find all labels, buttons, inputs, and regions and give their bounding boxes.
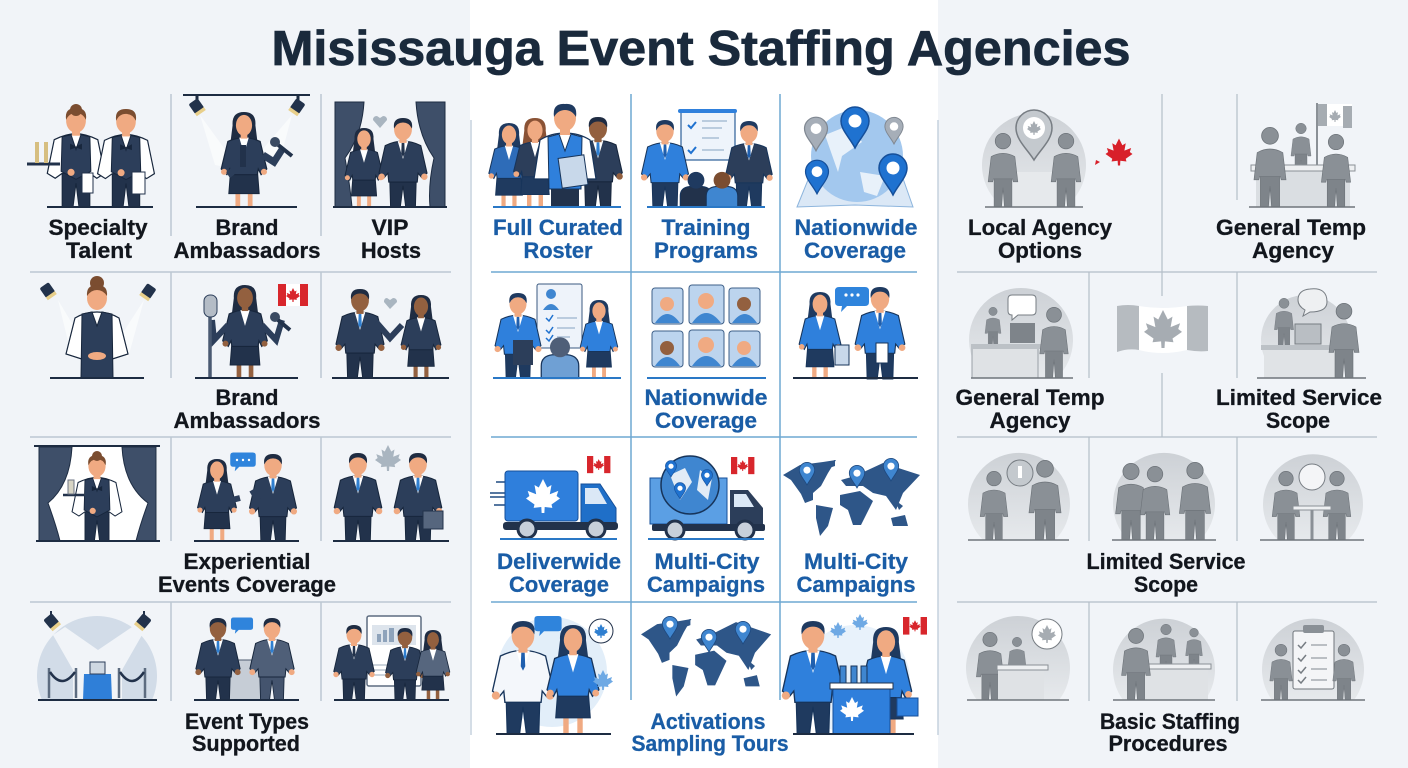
heading: Local Agency Options	[968, 215, 1113, 263]
heading: Multi-City Campaigns (second): Campaigns	[796, 572, 916, 597]
heading: VIP Hosts: VIP	[372, 215, 408, 240]
heading: Basic Staffing Procedures	[1100, 709, 1240, 756]
heading: Multi-City Campaigns: Multi-City	[654, 549, 760, 574]
heading: Full Curated Roster: Roster	[524, 238, 593, 263]
heading: Deliverwide Coverage	[497, 549, 621, 597]
heading: Brand Ambassadors: Ambassadors	[174, 238, 320, 263]
icon: interview desk	[966, 616, 1070, 700]
icon: nationwide globe and pins	[797, 107, 913, 207]
panel: local alternatives (right column)	[956, 103, 1382, 756]
icon: two hosts with speech bubble	[194, 452, 299, 541]
icon: limited service desk	[1257, 289, 1366, 378]
heading: Deliverwide Coverage: Deliverwide	[497, 549, 621, 574]
heading: VIP Hosts: Hosts	[361, 238, 421, 263]
icon: ambassador with microphone and flag	[195, 284, 308, 378]
heading: Specialty Talent: Talent	[66, 238, 133, 263]
heading: Event Types Supported: Supported	[192, 731, 300, 756]
heading: Training Programs	[654, 215, 758, 263]
heading: General Temp Agency (second)	[956, 385, 1104, 433]
heading: General Temp Agency: General Temp	[1216, 215, 1366, 240]
heading: Experiential Events Coverage	[158, 549, 336, 597]
heading: Nationwide Coverage (second row)	[644, 385, 768, 433]
heading: Activations Sampling Tours	[632, 709, 788, 756]
heading: Limited Service Scope	[1216, 385, 1382, 433]
heading: Brand Ambassadors (second row): Ambassadors	[174, 408, 320, 433]
heading: Nationwide Coverage (second row): Nationwide	[644, 385, 768, 410]
icon: general temp agency desk with flag	[1249, 103, 1355, 207]
heading: Basic Staffing Procedures: Basic Staffing	[1100, 709, 1240, 734]
heading: Limited Service Scope: Limited Service	[1216, 385, 1382, 410]
heading: Full Curated Roster: Full Curated	[493, 215, 623, 240]
heading: Basic Staffing Procedures: Procedures	[1108, 731, 1228, 756]
heading: Nationwide Coverage: Coverage	[804, 238, 906, 263]
panel: specialty staff (left column)	[27, 95, 450, 756]
heading: Limited Service Scope: Scope	[1266, 408, 1330, 433]
icon: world map	[641, 616, 771, 697]
heading: Multi-City Campaigns: Campaigns	[647, 572, 765, 597]
icon: curated roster team	[489, 104, 623, 207]
icon: roster profile board	[493, 284, 621, 378]
heading: General Temp Agency: Agency	[1252, 238, 1335, 263]
heading: General Temp Agency (second): Agency	[990, 408, 1071, 433]
heading: Full Curated Roster	[493, 215, 623, 263]
heading: Event Types Supported: Event Types	[185, 709, 309, 734]
heading: General Temp Agency (second): General Temp	[956, 385, 1104, 410]
heading: Brand Ambassadors (second row): Brand	[216, 385, 278, 410]
icon: sampling booth	[782, 614, 927, 735]
heading: Limited Service Scope (third row): Scope	[1134, 572, 1198, 597]
title: Misissauga Event Staffing Agencies	[272, 22, 1130, 76]
icon: VIP couple with curtains	[333, 102, 447, 207]
heading: Specialty Talent	[48, 215, 148, 263]
icon: waiter under spotlights	[39, 276, 157, 378]
heading: Deliverwide Coverage: Coverage	[509, 572, 609, 597]
heading: Nationwide Coverage: Nationwide	[794, 215, 918, 240]
heading: Limited Service Scope (third row): Limited Service	[1086, 549, 1246, 574]
icon: seated consultation	[968, 453, 1070, 540]
icon: staff handshake	[492, 616, 613, 734]
heading: Activations Sampling Tours: Sampling Tours	[632, 731, 788, 756]
icon: group handshake	[1112, 453, 1216, 540]
icon: checklist clipboard	[1261, 619, 1365, 700]
heading: Activations Sampling Tours: Activations	[650, 709, 766, 734]
heading: Brand Ambassadors: Brand	[216, 215, 278, 240]
icon: two men at podium	[194, 618, 299, 700]
icon: brand ambassador with spotlights	[183, 95, 310, 207]
heading: VIP Hosts	[361, 215, 421, 263]
icon: local agency with pin and maple leaf	[982, 110, 1132, 207]
heading: Experiential Events Coverage: Experiential	[184, 549, 310, 574]
heading: Multi-City Campaigns	[647, 549, 765, 597]
heading: Event Types Supported	[185, 709, 309, 756]
icon: training programs board	[641, 109, 773, 207]
heading: Experiential Events Coverage: Events Coverage	[158, 572, 336, 597]
icon: meeting at table	[1260, 454, 1364, 540]
heading: Local Agency Options: Local Agency	[968, 215, 1113, 240]
heading: Brand Ambassadors (second row)	[174, 385, 320, 433]
icon: branded delivery truck	[490, 456, 618, 539]
icon: world map with pins	[783, 458, 920, 536]
heading: Local Agency Options: Options	[998, 238, 1082, 263]
heading: Multi-City Campaigns (second): Multi-City	[804, 549, 909, 574]
icon: host between curtains	[34, 446, 160, 541]
icon: event table with rope and spotlights	[37, 611, 157, 700]
heading: Limited Service Scope (third row)	[1086, 549, 1246, 597]
heading: Training Programs: Programs	[654, 238, 758, 263]
panel: full-service agency (center column)	[489, 104, 927, 756]
heading: General Temp Agency	[1216, 215, 1366, 263]
icon: greyed Canadian flag	[1117, 305, 1208, 353]
heading: Multi-City Campaigns (second)	[796, 549, 916, 597]
heading: Training Programs: Training	[662, 215, 750, 240]
heading: Brand Ambassadors	[174, 215, 320, 263]
icon: two brand staff talking	[793, 287, 918, 379]
heading: Specialty Talent: Specialty	[48, 215, 148, 240]
panel: center background	[470, 0, 938, 768]
icon: campaign truck with globe	[648, 456, 765, 539]
icon: temp agency front desk	[969, 288, 1073, 378]
icon: two men with maple leaf	[333, 445, 449, 541]
icon: presentation with bar chart	[333, 616, 450, 700]
heading: Nationwide Coverage	[794, 215, 918, 263]
icon: waiters with tray	[27, 104, 154, 207]
icon: team reviewing document	[1113, 619, 1215, 700]
icon: two greeters in conversation	[332, 289, 449, 378]
heading: Nationwide Coverage (second row): Coverage	[655, 408, 757, 433]
icon: portrait grid	[647, 285, 766, 378]
